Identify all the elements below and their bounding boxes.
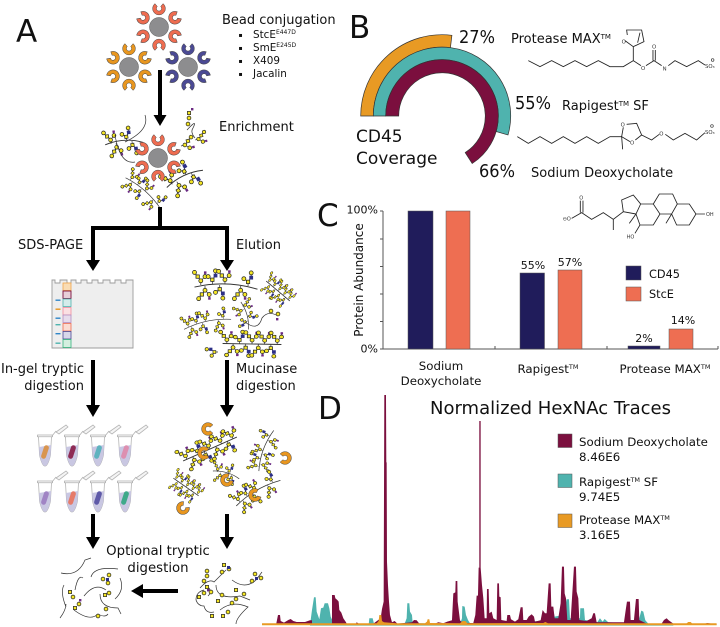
legend: traces: 9.74E5 bbox=[579, 490, 620, 504]
category labels: TM bbox=[700, 363, 710, 371]
axis labels: 100% bbox=[347, 204, 378, 216]
text: in-gel tryptic digestion bbox=[1, 362, 84, 394]
icon: deoxycholate structure: HO bbox=[627, 235, 634, 241]
trace: protease max bbox=[262, 615, 717, 625]
text: optional tryptic digestion: Optional tryptic bbox=[106, 544, 210, 559]
text: bead conjugation list: X409 bbox=[253, 55, 280, 67]
trace: sodium deoxycholate bbox=[276, 395, 717, 625]
axis labels bbox=[347, 204, 378, 356]
icon: protease max structure: SO₃ bbox=[705, 64, 715, 70]
icon: protease max structure: O bbox=[641, 66, 645, 72]
chart: bar chart bbox=[347, 204, 718, 388]
icon: rapigest structure: SO₃ bbox=[705, 130, 715, 136]
text: bead conjugation list: ▪ bbox=[238, 45, 243, 52]
text: bead conjugation list: ▪ bbox=[238, 32, 243, 39]
text: bead conjugation list: ▪ bbox=[238, 58, 243, 65]
percentage labels bbox=[459, 27, 551, 182]
icon: deoxycholate structure bbox=[563, 194, 714, 241]
text: bead conjugation list: Bead conjugation bbox=[222, 13, 336, 28]
text: in-gel tryptic digestion: In-gel tryptic bbox=[1, 362, 84, 377]
bars: rapigest bbox=[520, 270, 582, 349]
legend: traces: Rapigest bbox=[579, 475, 630, 489]
category labels: TM bbox=[568, 363, 579, 371]
axis labels: Protein Abundance bbox=[352, 223, 366, 337]
category labels: Rapigest bbox=[517, 362, 569, 376]
text: Elution: Elution bbox=[236, 238, 281, 253]
legend: bars bbox=[626, 266, 680, 301]
title: Normalized HexNAc Traces bbox=[430, 398, 671, 419]
bars: sodium deoxycholate bbox=[408, 211, 470, 349]
arrow: elution to mucinase bbox=[220, 360, 234, 417]
text: rapigest sf: SF bbox=[629, 99, 649, 114]
arrow: beads to enrichment bbox=[154, 70, 166, 126]
category labels: Sodium bbox=[419, 359, 463, 373]
value labels: 55% bbox=[521, 259, 545, 272]
icon: protease max structure: O bbox=[652, 45, 656, 51]
arrow: to tryptic peptides bbox=[131, 584, 178, 598]
text: protease max: Protease MAX bbox=[511, 32, 601, 47]
icon: rapigest structure bbox=[517, 123, 715, 149]
icon: protease max structure: N bbox=[663, 67, 667, 73]
text: optional tryptic digestion bbox=[106, 544, 210, 576]
icon: rapigest structure: O bbox=[659, 131, 664, 137]
icon: protease max structure bbox=[528, 30, 715, 73]
text: CD45 coverage: Coverage bbox=[356, 149, 437, 169]
icon: tryptic peptides bbox=[60, 558, 122, 618]
icon: deoxycholate structure: OH bbox=[706, 212, 714, 218]
arrow: tubes to peptides bbox=[86, 514, 100, 549]
chart: chromatogram traces bbox=[262, 395, 717, 626]
chart: radial coverage arcs bbox=[361, 35, 511, 164]
text: enrichment: Enrichment bbox=[219, 120, 294, 135]
text: mucinase digestion: digestion bbox=[236, 379, 296, 394]
icon: rapigest structure: O bbox=[630, 140, 634, 146]
panel: A workflow bbox=[1, 4, 336, 624]
panel letter C: C bbox=[317, 198, 339, 234]
legend: traces: 8.46E6 bbox=[579, 450, 620, 464]
icon: deoxycholate structure: O bbox=[579, 195, 583, 201]
value labels bbox=[521, 256, 695, 345]
icon: mucinase digesting glycopeptides bbox=[165, 423, 291, 517]
percentage labels: 66% bbox=[479, 161, 515, 182]
panel letter D: D bbox=[318, 391, 342, 427]
icon: digestion tubes bbox=[38, 425, 148, 512]
legend: traces: TM bbox=[659, 514, 670, 522]
legend: bars: StcE bbox=[649, 288, 674, 301]
text: bead conjugation list: E245D bbox=[276, 42, 297, 49]
text: optional tryptic digestion: digestion bbox=[127, 561, 189, 576]
percentage labels: 55% bbox=[515, 93, 551, 114]
legend: traces: Protease MAX bbox=[579, 513, 660, 527]
text: rapigest sf: TM bbox=[618, 100, 629, 108]
text: protease max: TM bbox=[600, 33, 611, 41]
panel: D HexNAc traces bbox=[262, 391, 717, 626]
value labels: 14% bbox=[671, 314, 695, 327]
text: bead conjugation list: ▪ bbox=[238, 71, 243, 78]
icon: deoxycholate structure: ⊖O bbox=[563, 217, 571, 223]
panel letter A: A bbox=[16, 14, 37, 50]
icon: rapigest structure: O bbox=[621, 123, 625, 129]
category labels: Protease MAX bbox=[620, 362, 701, 376]
text: rapigest sf: Rapigest bbox=[562, 99, 619, 114]
text: CD45 coverage bbox=[356, 127, 437, 169]
arc: sodium deoxycholate 66% bbox=[386, 60, 498, 164]
percentage labels: 27% bbox=[459, 27, 495, 48]
text: bead conjugation list bbox=[222, 13, 336, 80]
text: in-gel tryptic digestion: digestion bbox=[24, 379, 84, 394]
value labels: 2% bbox=[635, 332, 653, 345]
text: mucinase digestion: Mucinase bbox=[236, 362, 297, 377]
arrow: mucinase to glycopeptides bbox=[220, 514, 234, 549]
category labels: Deoxycholate bbox=[401, 374, 481, 388]
icon: eluted glycopeptides bbox=[179, 269, 298, 358]
panel: B CD45 coverage bbox=[349, 10, 715, 182]
icon: conjugated beads bbox=[106, 4, 211, 90]
text: SDS-PAGE: SDS-PAGE bbox=[18, 238, 83, 253]
text: sodium deoxycholate: Sodium Deoxycholate bbox=[531, 166, 673, 181]
legend: bars: CD45 bbox=[649, 268, 680, 281]
arrow: split into two paths bbox=[86, 207, 234, 271]
text: bead conjugation list: Jacalin bbox=[252, 68, 287, 80]
bars: protease max bbox=[628, 329, 693, 349]
trace: rapigest bbox=[310, 597, 673, 626]
legend: traces bbox=[558, 434, 708, 542]
panel letter B: B bbox=[349, 10, 370, 46]
chart axes bbox=[380, 211, 718, 349]
arc: protease max 27% bbox=[361, 35, 452, 116]
arc: rapigest 55% bbox=[373, 47, 511, 135]
legend: traces: Sodium Deoxycholate bbox=[579, 435, 708, 449]
icon: released glycopeptides bbox=[196, 563, 263, 624]
text: mucinase digestion bbox=[236, 362, 297, 394]
text: bead conjugation list: E447D bbox=[276, 29, 296, 36]
gel: SDS-PAGE bbox=[52, 280, 133, 348]
legend: traces: SF bbox=[640, 475, 658, 489]
legend: traces: TM bbox=[629, 476, 640, 484]
text: bead conjugation list: SmE bbox=[253, 42, 276, 54]
icon: protease max structure: O bbox=[622, 39, 626, 45]
text: bead conjugation list: StcE bbox=[253, 29, 276, 41]
panel: C protein abundance bbox=[317, 194, 718, 388]
category labels bbox=[401, 359, 710, 388]
icon: enriched bead with glycopeptides bbox=[101, 108, 209, 217]
text: CD45 coverage: CD45 bbox=[356, 127, 403, 147]
axis labels: 0% bbox=[361, 342, 378, 356]
legend: traces: 3.16E5 bbox=[579, 528, 620, 542]
value labels: 57% bbox=[558, 256, 582, 269]
arrow: gel to tubes bbox=[86, 360, 100, 417]
